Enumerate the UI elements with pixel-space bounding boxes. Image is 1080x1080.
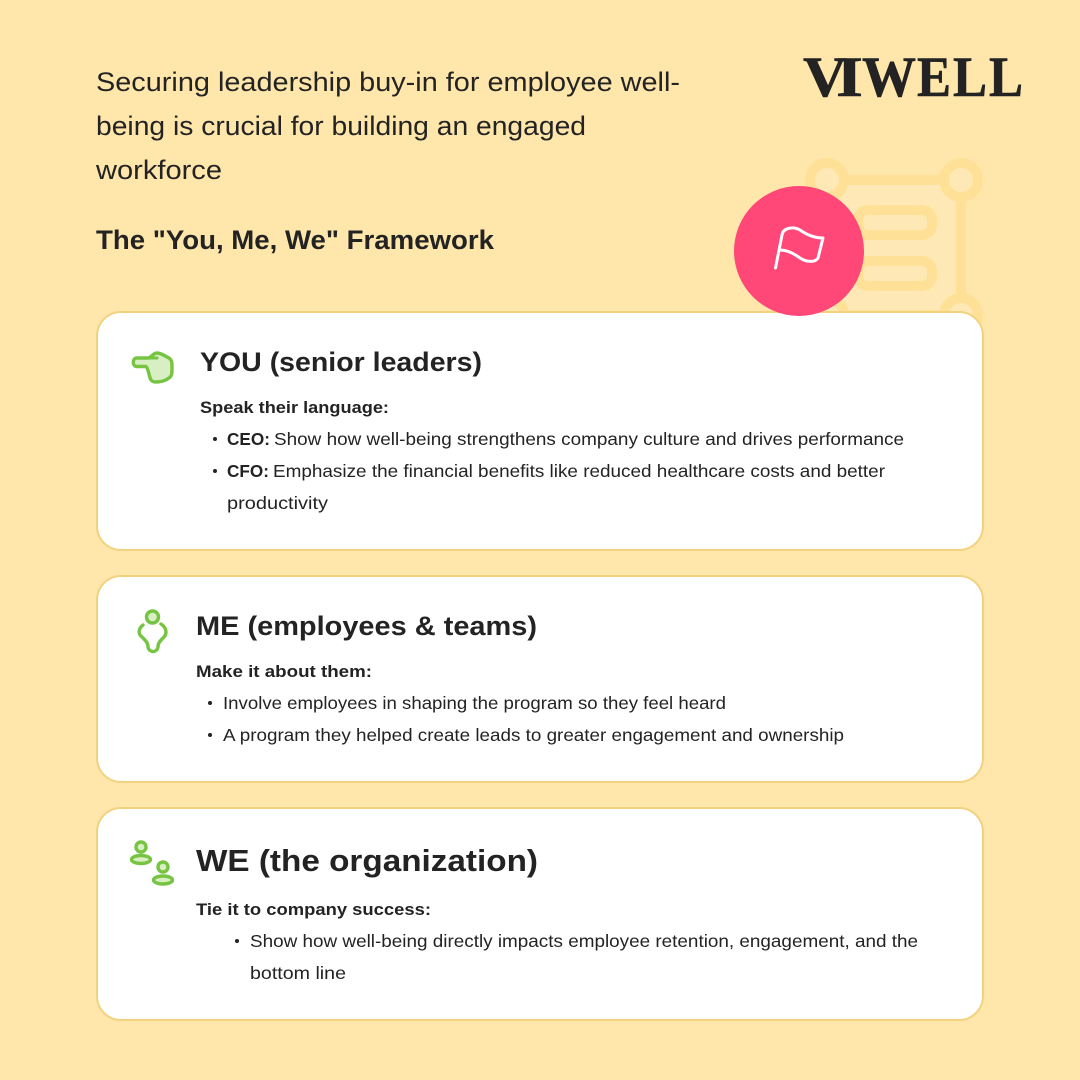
text: involve bullet: Involve employees in shaping the program so they feel heard [223,693,726,713]
logo: VIWELL: W [862,46,916,109]
text: CFO bullet [213,461,885,513]
text: CFO bullet: Emphasize the financial benefits like reduced healthcare costs and better [273,461,885,481]
text: CEO bullet: Show how well-being strengthens company culture and drives performance [274,429,904,449]
panel: YOU [97,312,983,550]
text: speak their language: Speak their language: [200,399,389,417]
icon: faded background framework diagram [810,163,978,332]
logo: VIWELL: I [836,46,863,109]
panel: ME [97,576,983,782]
logo: VIWELL: E [917,46,951,109]
logo: VIWELL: L [989,46,1023,109]
icon: pointing hand [133,353,172,382]
icon: two people [132,842,172,884]
text: CEO bullet: CEO: [227,429,270,449]
icon: person [139,611,166,652]
heading: intro statement: being is crucial for building an engaged [96,111,586,141]
heading: ME: ME (employees & teams) [196,611,537,641]
text: tie it to company success: Tie it to company success: [196,901,431,919]
text: well-being bullet: bottom line [250,963,346,983]
text: CFO bullet: productivity [227,493,328,513]
heading: WE: WE (the organization) [196,843,538,878]
logo: VIWELL [803,46,1023,109]
heading: intro statement: Securing leadership buy-in for employee well- [96,67,680,97]
logo: VIWELL: V [803,46,847,109]
text: program bullet: A program they helped create leads to greater engagement and ownership [223,725,844,745]
heading: YOU: YOU (senior leaders) [200,347,482,377]
text: well-being bullet: Show how well-being directly impacts employee retention, engagement, and the [250,931,918,951]
subtitle: framework name: The "You, Me, We" Framework [96,225,495,255]
text: CFO bullet: CFO: [227,461,269,481]
heading: intro statement [95,67,680,185]
heading: intro statement: workforce [95,155,222,185]
icon: pink circle with flag [734,186,864,316]
logo: VIWELL: L [953,46,987,109]
panel: WE [97,808,983,1020]
text: well-being bullet [235,931,918,983]
text: make it about them: Make it about them: [196,663,372,681]
